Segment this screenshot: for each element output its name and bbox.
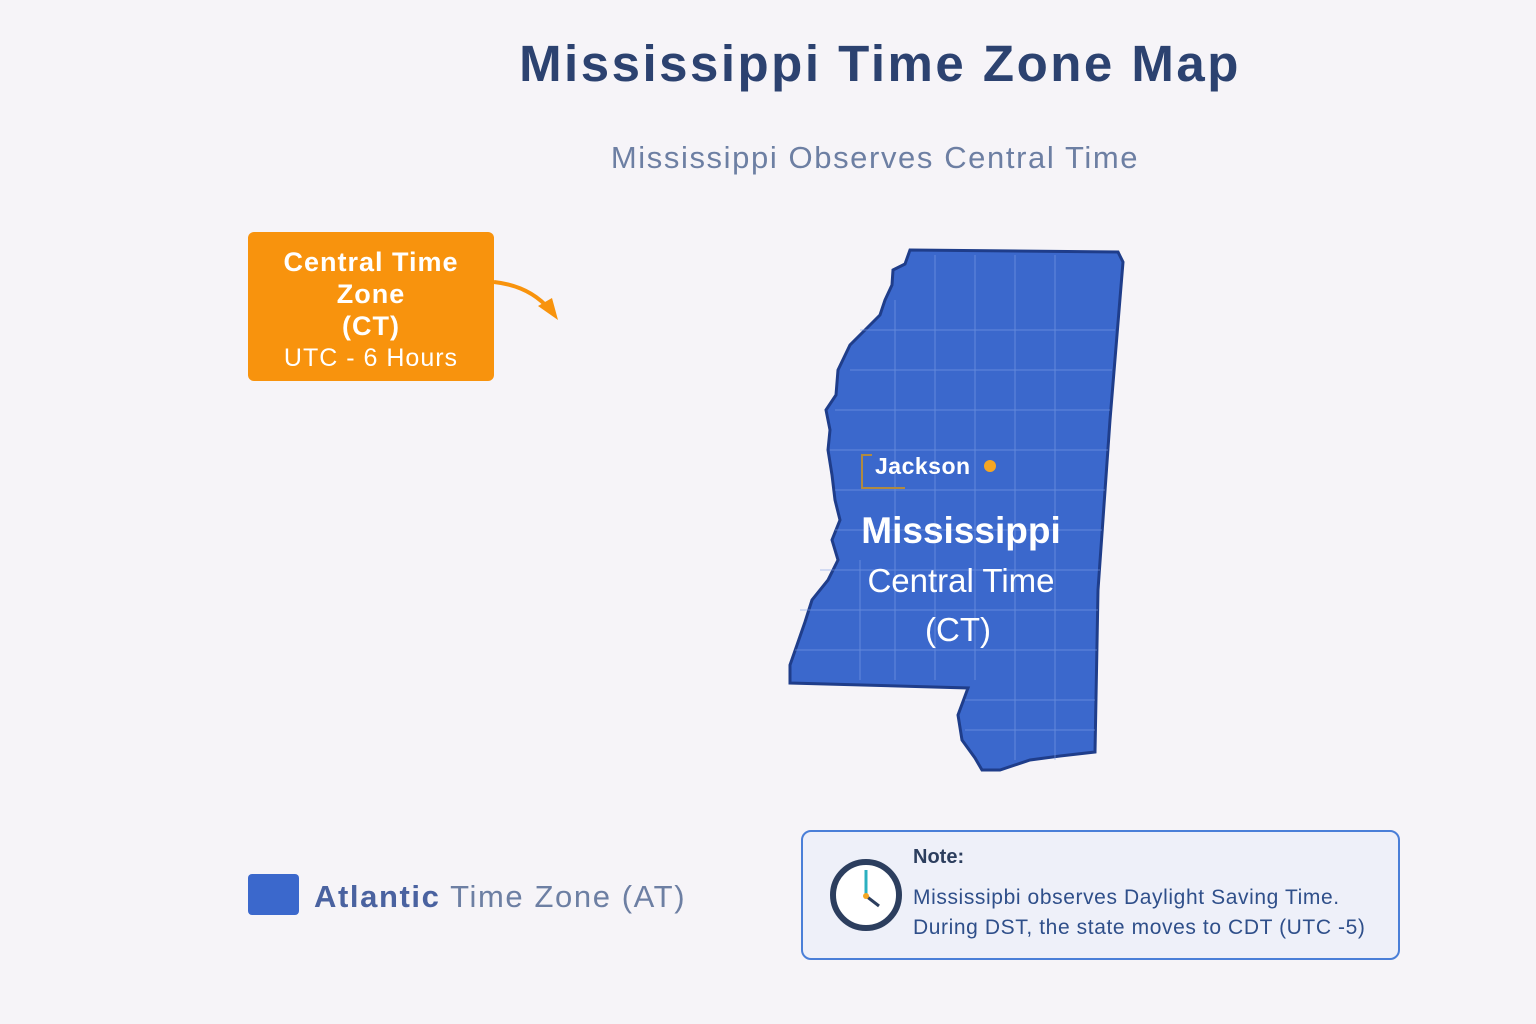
arrow: callout to map [494,280,558,320]
note box: Mississipbi observes Daylight Saving Time. [913,886,1340,909]
label: Jackson [862,453,996,488]
subtitle: Mississippi Observes Central Time [611,140,1139,175]
note box [801,830,1400,960]
callout: central time zone: UTC - 6 Hours [284,344,458,372]
label: state name: (CT) [925,611,991,648]
label: state name [861,510,1061,648]
label: Jackson: Jackson [875,453,971,479]
icon: clock [830,859,902,931]
note box: Note: [913,846,964,868]
callout: central time zone [248,232,494,381]
legend: Atlantic Time Zone (AT) [314,879,686,914]
note box: During DST, the state moves to CDT (UTC -5) [913,916,1366,939]
label: state name: Central Time [867,562,1055,599]
callout: central time zone: Central Time [283,247,459,277]
callout: central time zone: (CT) [342,311,400,341]
title: Mississippi Time Zone Map [519,35,1241,92]
callout: central time zone: Zone [337,279,405,309]
label: state name: Mississippi [861,510,1061,551]
